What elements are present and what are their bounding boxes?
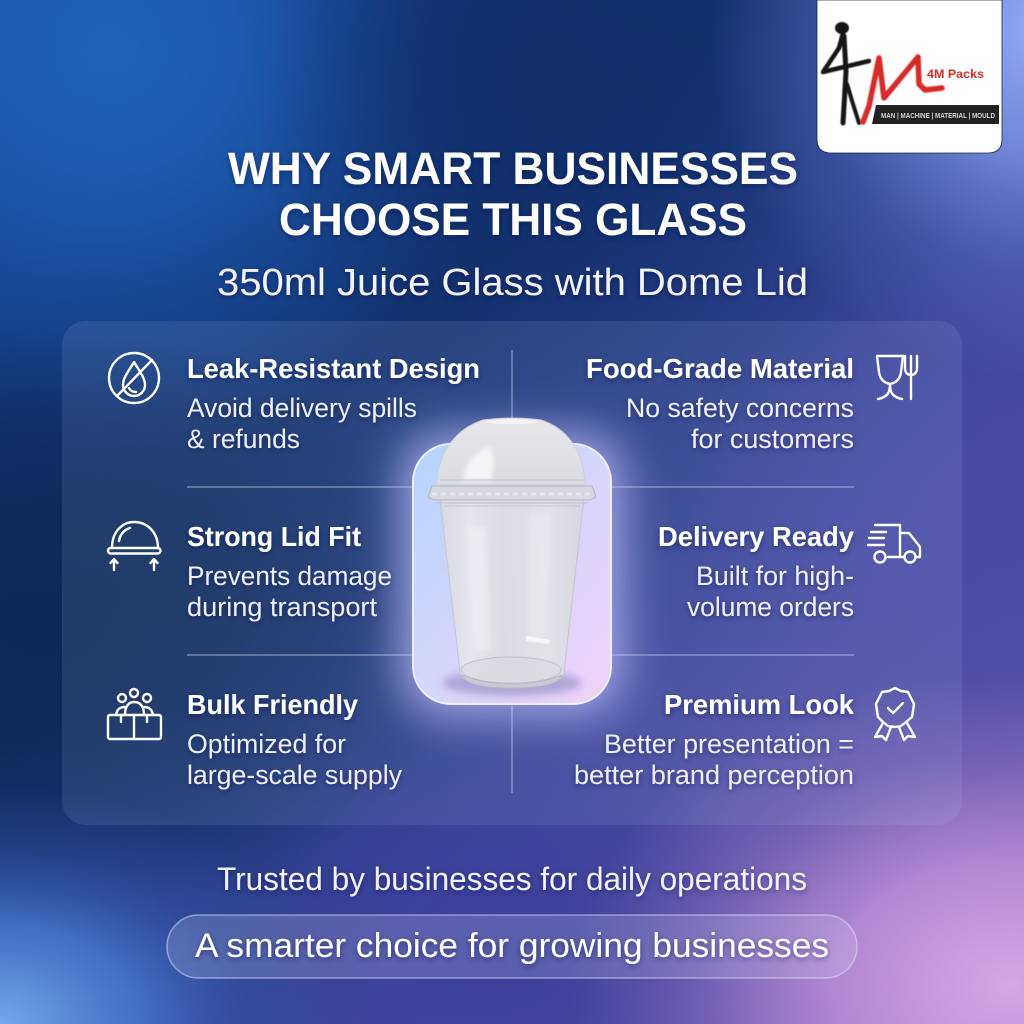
text: premium look [574,689,854,790]
text: leak-resistant design [187,353,480,454]
text: bulk friendly: Optimized for [187,729,346,759]
title [228,143,798,245]
icon: award badge [875,688,915,740]
icon: delivery truck [868,525,920,562]
cup shadow [442,670,582,696]
panel: benefits glass panel [62,321,962,825]
text: premium look: better brand perception [574,760,854,790]
card glow [400,432,624,716]
benefit: premium look [574,688,915,790]
title: WHY SMART BUSINESSES [228,143,798,194]
benefit: delivery ready [658,521,920,622]
text: strong lid fit: Prevents damage [187,561,392,591]
benefit: bulk friendly [108,689,402,790]
lid rim [428,486,596,503]
text: bulk friendly [187,689,402,790]
text: food-grade material: for customers [691,424,854,454]
text: leak-resistant design: & refunds [187,424,300,454]
call-to-action pill [167,915,857,978]
icon: lid with arrows [108,522,160,570]
text: strong lid fit: Strong Lid Fit [187,521,361,552]
icon: boxes with people [108,689,161,739]
text: food-grade material [586,353,854,454]
logo figure: 4 [823,22,869,123]
text: leak-resistant design: Leak-Resistant Design [187,353,480,384]
logo tagline bar [872,105,999,124]
text: bulk friendly: large-scale supply [187,760,402,790]
product: cup with dome lid [428,418,596,696]
text: bulk friendly: Bulk Friendly [187,689,358,720]
text: food-grade material: No safety concerns [626,393,854,423]
text: delivery ready: Built for high- [696,561,854,591]
text: premium look: Better presentation = [604,729,854,759]
logo tagline bar: MAN | MACHINE | MATERIAL | MOULD [881,113,995,120]
icon: glass and fork [877,356,917,399]
cup base [461,657,562,688]
logo card [817,0,1002,153]
icon: crossed-out water drop [109,353,159,403]
divider lines [187,350,854,793]
dome lid [437,418,585,485]
subtitle: 350ml Juice Glass with Dome Lid [217,262,808,304]
cup body [440,498,584,688]
benefit: leak-resistant design [109,353,480,454]
logo name: 4M Packs [927,67,984,81]
trust line: Trusted by businesses for daily operations [217,861,807,897]
cup highlights [445,506,580,650]
product card [413,444,611,704]
text: delivery ready: Delivery Ready [658,521,854,552]
text: strong lid fit: during transport [187,592,377,622]
title: CHOOSE THIS GLASS [279,194,747,245]
text: delivery ready: volume orders [687,592,854,622]
text: delivery ready [658,521,854,622]
text: food-grade material: Food-Grade Material [586,353,854,384]
benefit: food-grade material [586,353,917,454]
text: strong lid fit [187,521,392,622]
benefit: strong lid fit [108,521,392,622]
text: leak-resistant design: Avoid delivery spills [187,393,417,423]
call-to-action pill: A smarter choice for growing businesses [195,927,829,965]
text: premium look: Premium Look [664,689,854,720]
logo letter M [863,57,942,122]
